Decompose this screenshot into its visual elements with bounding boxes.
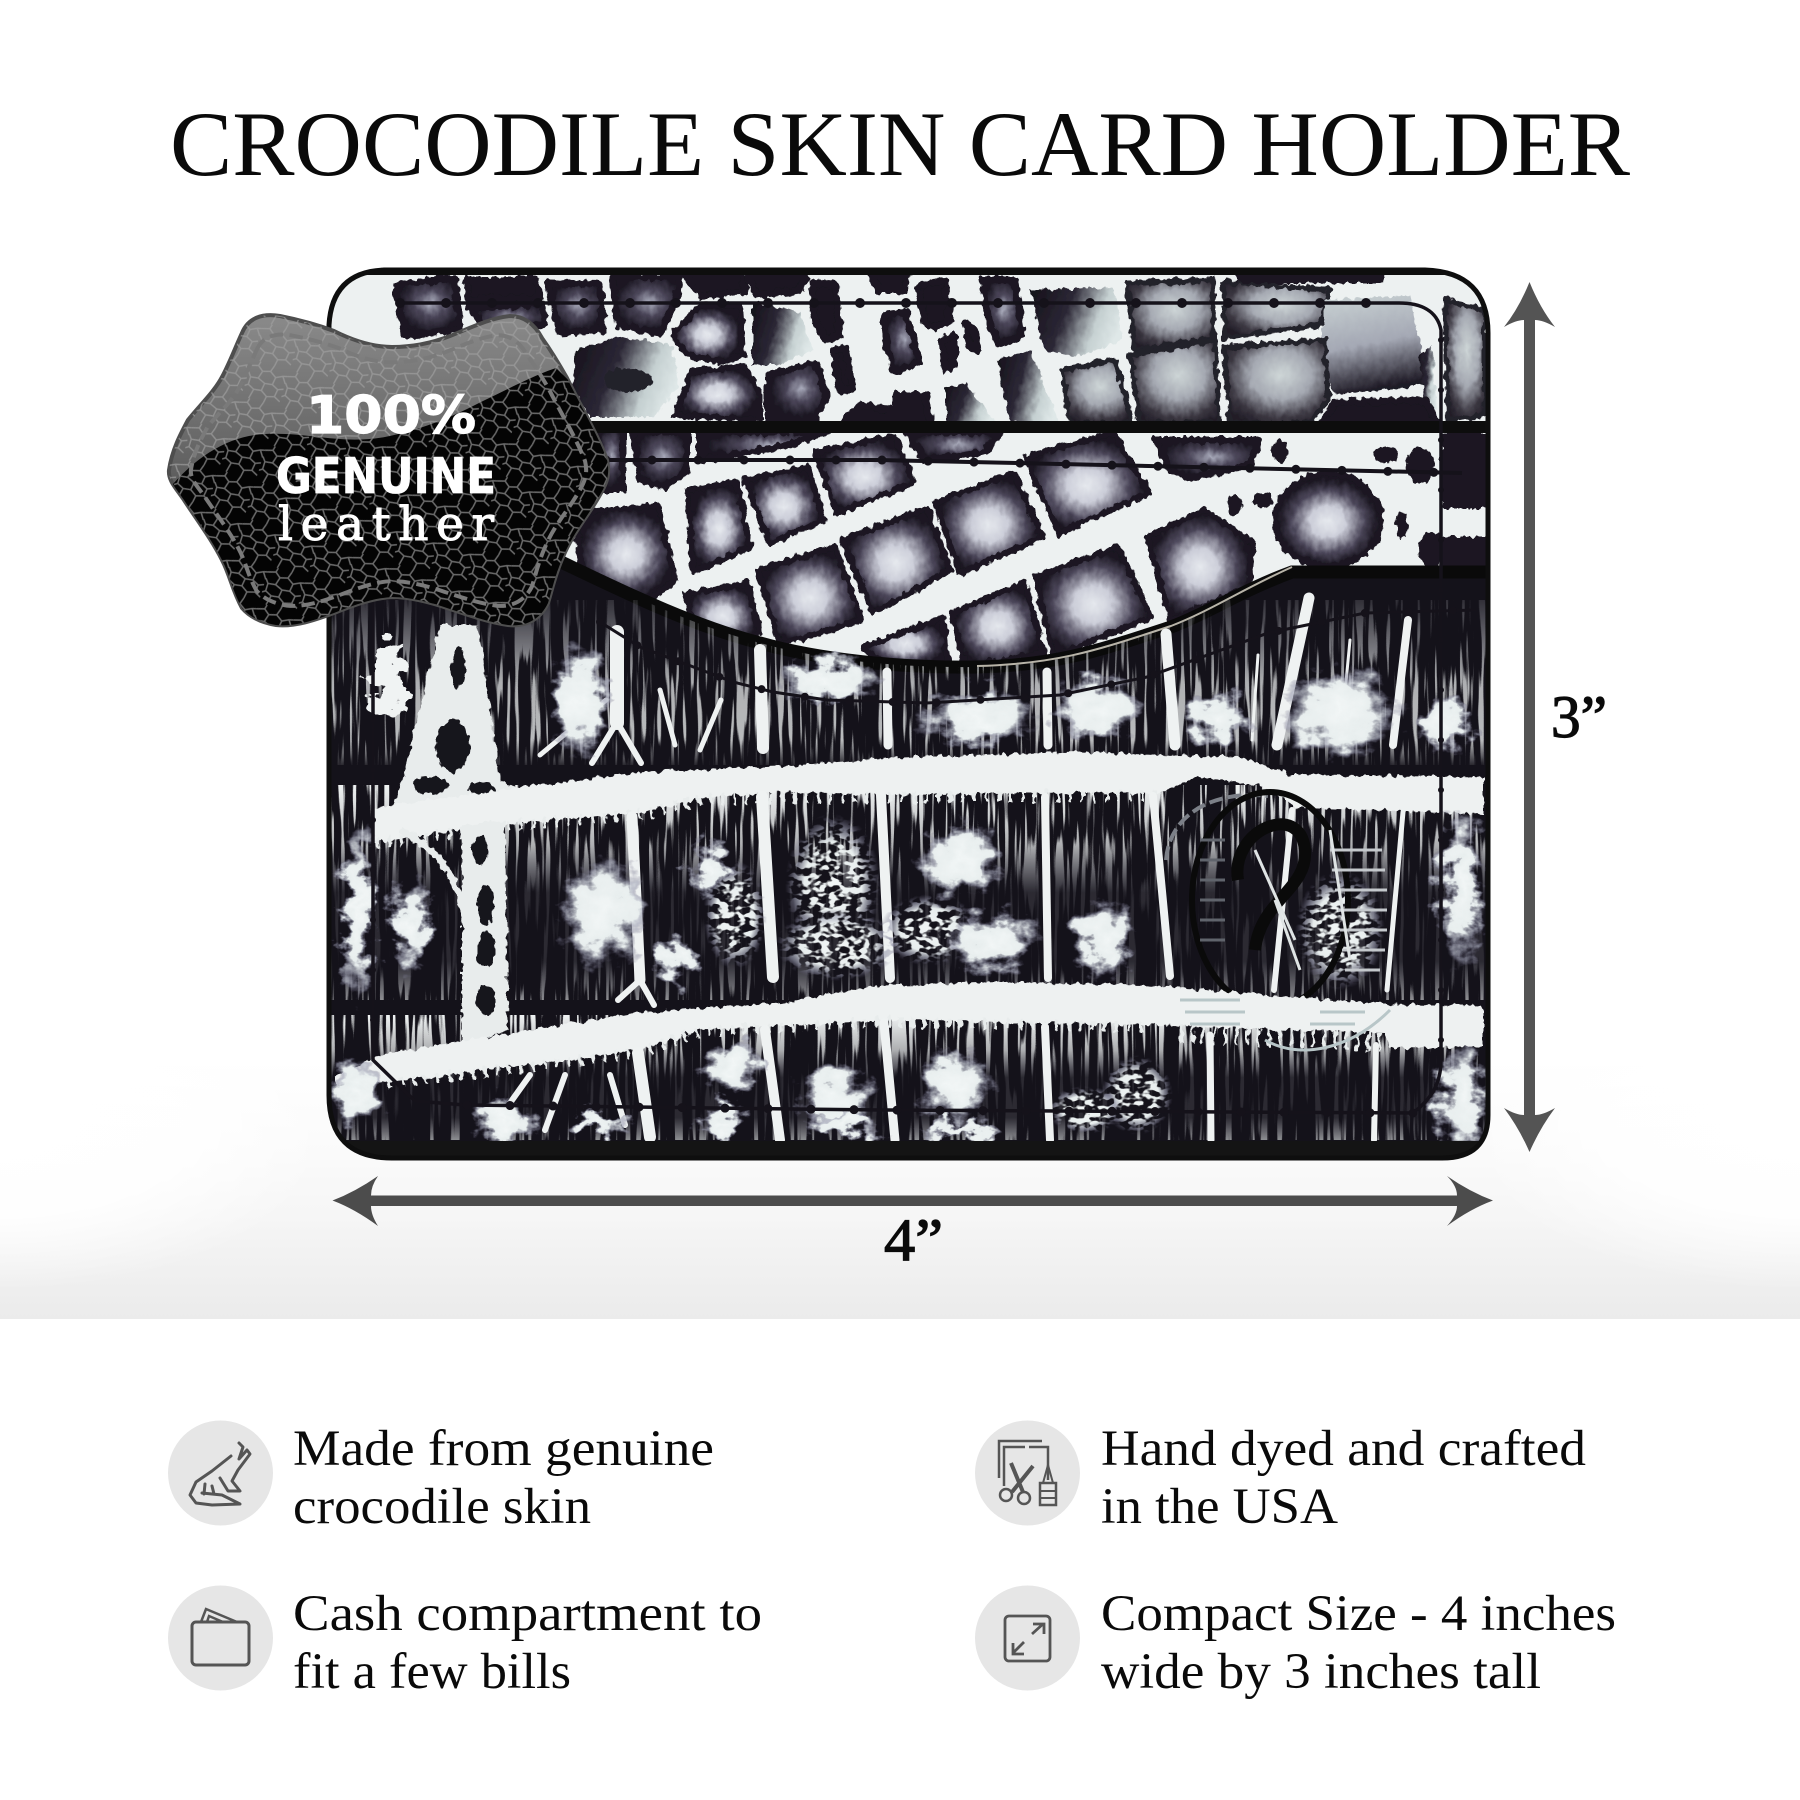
top leather rim <box>367 272 1444 275</box>
top row scales <box>395 270 1485 420</box>
text <box>293 1586 762 1700</box>
text: in the USA <box>1101 1479 1338 1535</box>
text: Compact Size - 4 inches <box>1101 1586 1616 1642</box>
logo emboss on band <box>1180 1000 1390 1050</box>
text <box>1101 1586 1616 1700</box>
white veins main scale row <box>618 795 1403 1005</box>
genuine leather badge <box>166 313 610 628</box>
text: Cash compartment to <box>293 1586 762 1642</box>
fine vertical streak texture <box>329 600 1488 1140</box>
mottled pale markings main row <box>703 813 1385 1135</box>
badge text leather: leather <box>278 497 495 552</box>
badge text 100%: 100% <box>306 386 476 446</box>
icon: tools <box>975 1420 1080 1526</box>
text: Hand dyed and crafted <box>1101 1421 1586 1477</box>
text <box>293 1421 714 1535</box>
feature: genuine crocodile skin <box>168 1420 714 1535</box>
white lattice lower left <box>400 820 508 1045</box>
feature: hand dyed <box>975 1420 1586 1535</box>
white veins upper pocket zone <box>540 598 1408 763</box>
icon: resize <box>975 1586 1080 1690</box>
width dimension arrow <box>332 1176 1493 1226</box>
white band one <box>373 752 1483 844</box>
text: wide by 3 inches tall <box>1101 1644 1541 1700</box>
text <box>1101 1421 1586 1535</box>
white band two <box>335 982 1483 1085</box>
bottom rim <box>490 1141 1478 1155</box>
height dimension arrow <box>1504 282 1555 1152</box>
lower dark leather pocket <box>329 540 1488 1158</box>
white veins bottom row <box>505 1023 1376 1140</box>
feature: compact size <box>975 1586 1616 1700</box>
diagonal belly scales <box>577 427 1486 667</box>
icon: crocodile <box>168 1420 273 1526</box>
height label: 3” <box>1551 684 1607 750</box>
feature: cash compartment <box>168 1586 762 1700</box>
text: fit a few bills <box>293 1644 571 1700</box>
upper pale leather base <box>329 270 1488 690</box>
pale patches upper pocket zone <box>372 639 1473 758</box>
pale markings bottom row <box>329 1039 1006 1144</box>
pocket curved highlight <box>977 567 1292 666</box>
studio floor gradient <box>0 1203 1800 1319</box>
upper slot edge <box>560 421 1490 433</box>
title: CROCODILE SKIN CARD HOLDER <box>170 93 1631 195</box>
text: crocodile skin <box>293 1479 591 1535</box>
white lattice upper left <box>393 623 516 806</box>
badge glossy base <box>169 315 608 625</box>
text: Made from genuine <box>293 1421 714 1477</box>
badge text genuine: GENUINE <box>276 448 496 505</box>
stitching lines <box>373 303 1476 1113</box>
icon: wallet <box>168 1586 273 1690</box>
crocodile leather card holder <box>329 268 1490 1159</box>
pocket curved edge <box>500 548 1488 667</box>
badge stitching <box>191 335 586 606</box>
badge texture <box>169 315 608 626</box>
width label: 4” <box>884 1207 943 1273</box>
solid pale markings main row <box>340 807 1488 1157</box>
card outline <box>329 270 1488 1158</box>
embossed logo medallion <box>1166 792 1387 1008</box>
second row scales <box>573 337 1437 423</box>
